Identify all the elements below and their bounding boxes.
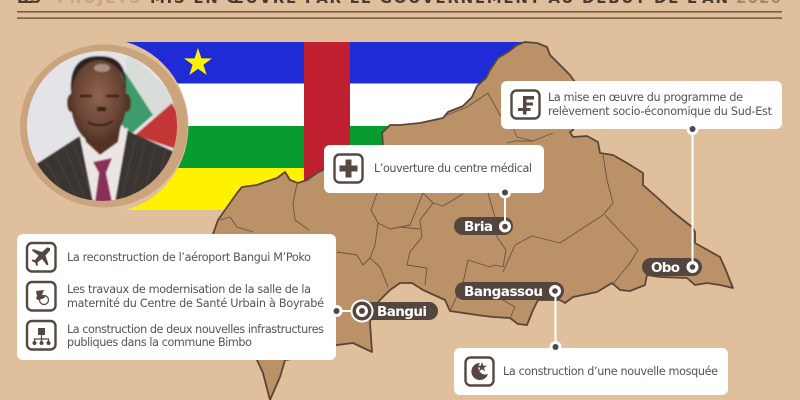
portrait of the president	[20, 39, 188, 215]
marker: Bangui	[330, 300, 438, 322]
callout: socio-economic programme: relèvement socio-économique du Sud-Est	[548, 105, 773, 118]
icon: franc currency	[512, 90, 540, 118]
callout: Bangui projects	[17, 234, 336, 360]
callout: socio-economic programme	[501, 81, 782, 129]
callout: Bangui projects: La construction de deux nouvelles infrastructures	[67, 323, 324, 336]
icon: organisation chart	[27, 321, 56, 350]
callout: Bangui projects: Les travaux de modernisation de la salle de la	[67, 283, 311, 296]
flag	[120, 42, 527, 210]
icon: airplane	[27, 243, 56, 272]
marker: Obo: Obo	[651, 260, 680, 276]
marker: Bria	[454, 186, 513, 235]
callout: mosque	[454, 348, 728, 395]
map of the Central African Republic	[213, 42, 733, 400]
callout: Bangui projects: maternité du Centre de Santé Urbain à Boyrabé	[67, 297, 324, 310]
marker: Bangassou	[455, 282, 564, 353]
marker: Obo	[642, 123, 702, 276]
marker: Bria: Bria	[464, 219, 493, 235]
callout: mosque: La construction d’une nouvelle mosquée	[503, 365, 718, 378]
callout: medical centre	[324, 145, 544, 193]
callout: Bangui projects: publiques dans la commune Bimbo	[67, 336, 252, 349]
callout: medical centre: L’ouverture du centre médical	[374, 162, 532, 175]
callout: Bangui projects: La reconstruction de l’aéroport Bangui M’Poko	[67, 251, 311, 264]
marker: Bangui: Bangui	[377, 304, 427, 320]
callout: socio-economic programme: La mise en œuvre du programme de	[548, 91, 743, 104]
icon: pacifier	[27, 282, 56, 310]
icon: crescent and star	[466, 358, 494, 386]
marker: Bangassou: Bangassou	[464, 284, 543, 300]
icon: medical cross	[334, 154, 362, 182]
